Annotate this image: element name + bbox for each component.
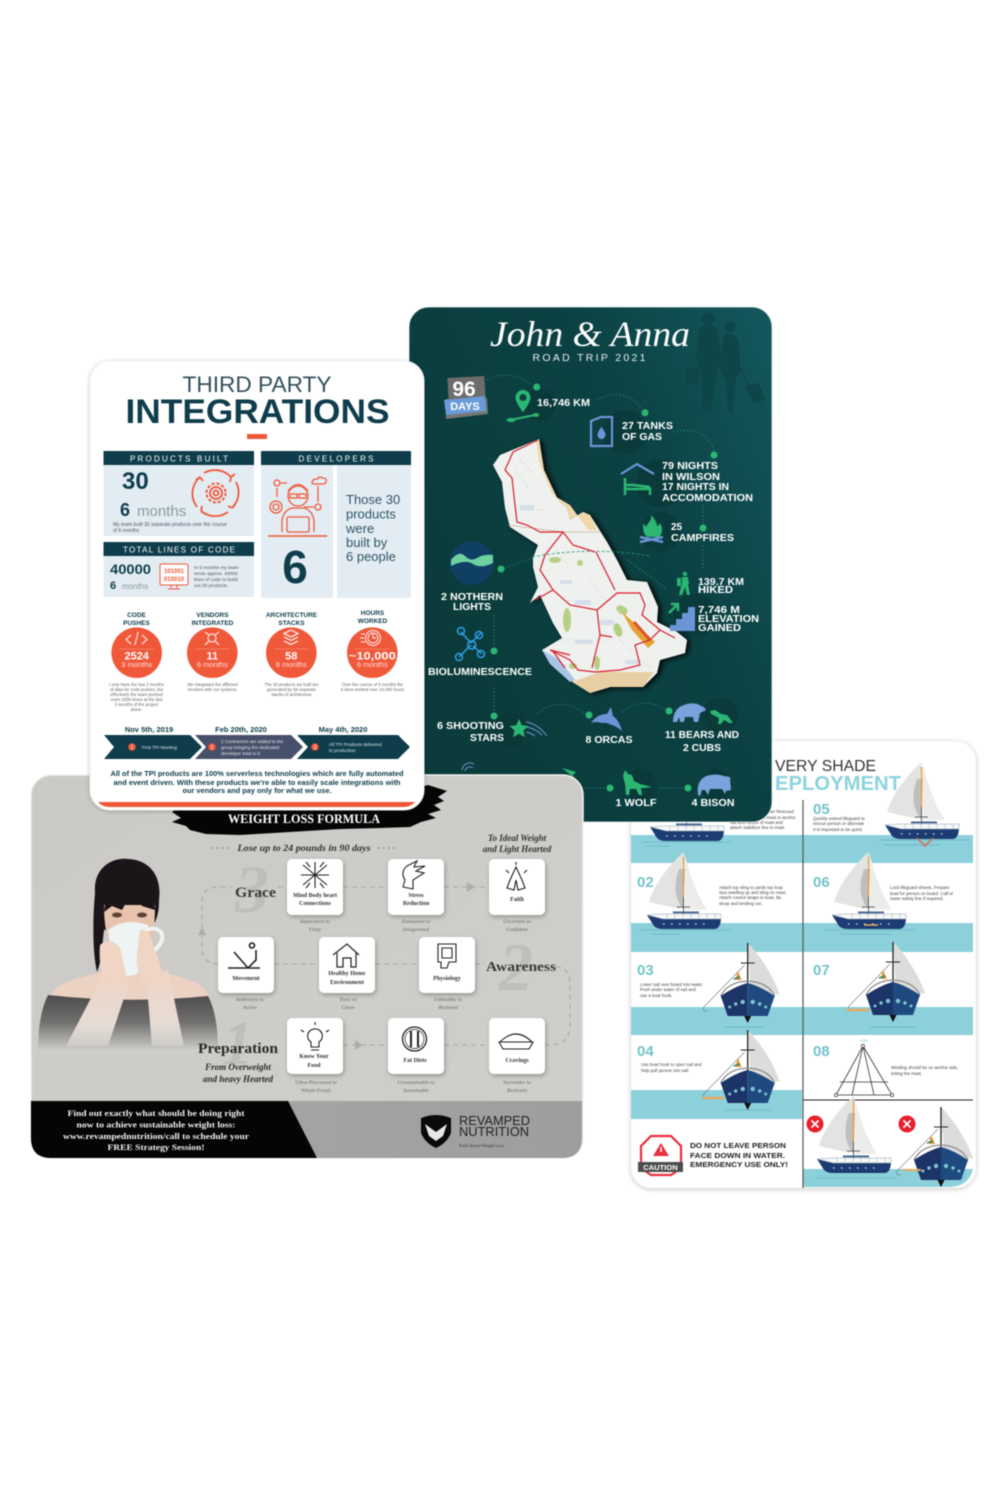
stat: tanks of gas bbox=[591, 409, 673, 446]
card: Healthy Home Environment: Toxic to bbox=[339, 997, 357, 1003]
stat circle: code pushes: I only have the last 3 months bbox=[109, 682, 164, 687]
card: Stress Reduction: Invigorated bbox=[402, 927, 429, 933]
call to action text: Find out exactly what should be doing right bbox=[68, 1108, 245, 1118]
card: Cravings bbox=[489, 1018, 545, 1094]
step 08 rigging diagram: Winding should be on anchor side, bbox=[891, 1065, 958, 1070]
step 02: 02 bbox=[637, 874, 654, 891]
stat circle: hours worked: Over the course of 6 months the bbox=[342, 682, 404, 687]
stage label: Awareness: Awareness bbox=[486, 959, 556, 974]
stat: tanks of gas: OF GAS bbox=[622, 432, 662, 443]
title: THIRD PARTY bbox=[182, 372, 332, 397]
stat: campfires bbox=[640, 515, 734, 544]
icon: binary monitor: 101001 bbox=[164, 569, 185, 575]
call to action text bbox=[63, 1108, 249, 1152]
stat: bears and cubs: 11 BEARS AND bbox=[665, 729, 739, 741]
card: Fat Diets bbox=[388, 1018, 444, 1094]
woman with mug photo bbox=[38, 859, 218, 1050]
step 05 bbox=[813, 762, 959, 846]
logo: Revamped Nutrition: REVAMPED bbox=[459, 1113, 530, 1128]
logo: Revamped Nutrition: Faith Based Weight Loss bbox=[459, 1143, 504, 1148]
goal text: To Ideal Weight bbox=[488, 833, 547, 843]
step 01 boat bbox=[650, 764, 724, 841]
heading: weight loss formula: WEIGHT LOSS FORMULA bbox=[228, 811, 381, 826]
card: Movement: Active bbox=[242, 1005, 257, 1011]
flow arrows bbox=[198, 882, 475, 1050]
goal text: and Light Hearted bbox=[483, 844, 552, 854]
panel: sailboat every shade deployment sheet bbox=[631, 741, 976, 1188]
footer band bbox=[31, 1101, 582, 1158]
timeline labels: 2 bbox=[211, 745, 214, 751]
caution text: FACE DOWN IN WATER. bbox=[690, 1151, 785, 1160]
step 05: rescue person or alternate bbox=[813, 821, 865, 826]
stat circle: vendors integrated: 11 bbox=[206, 650, 218, 662]
stat: bears and cubs: 2 CUBS bbox=[683, 742, 721, 754]
stat: 96 days badge bbox=[444, 376, 488, 419]
timeline labels: First TPI Meeting bbox=[142, 745, 177, 750]
step 03: use a boat hook. bbox=[640, 993, 672, 998]
panel: developers: built by bbox=[346, 535, 388, 550]
panel: products built: 6 bbox=[120, 500, 130, 520]
timeline dates: Feb 20th, 2020 bbox=[215, 725, 267, 734]
panel: developers: Those 30 bbox=[346, 492, 400, 507]
panel: products built: 30 bbox=[122, 468, 149, 495]
panel: developers bbox=[261, 451, 411, 598]
stat: bears and cubs bbox=[665, 703, 739, 754]
stat: bioluminescence: BIOLUMINESCENCE bbox=[428, 667, 532, 678]
card: Physiology: Physiology bbox=[433, 976, 461, 982]
step 02 bbox=[637, 852, 787, 929]
card: Stress Reduction bbox=[388, 859, 444, 933]
stat: elevation gained: GAINED bbox=[698, 623, 741, 634]
stat: tanks of gas: 27 TANKS bbox=[622, 421, 673, 432]
closing statement: All of the TPI products are 100% serverless technologies which are fully automated bbox=[110, 769, 404, 778]
call to action text: FREE Strategy Session! bbox=[108, 1142, 205, 1152]
timeline labels: 1 bbox=[131, 745, 134, 751]
stat circle: code pushes: CODE bbox=[127, 612, 147, 619]
step 07 bbox=[813, 942, 925, 1022]
step 01 text: attach stabilizer line to mast bbox=[730, 825, 785, 830]
stat: distance: 16,746 KM bbox=[537, 398, 590, 409]
stat circle: vendors integrated: INTEGRATED bbox=[192, 620, 234, 627]
card: Know Your Food: Whole-Foods bbox=[301, 1088, 331, 1094]
card: Know Your Food: Food bbox=[307, 1063, 321, 1069]
timeline labels: to production bbox=[329, 748, 356, 753]
caution text: EMERGENCY USE ONLY! bbox=[690, 1160, 788, 1169]
stat circle: architecture stacks bbox=[264, 612, 319, 697]
card: Movement bbox=[218, 937, 274, 1011]
step 03: Lower sail over board into water. bbox=[640, 982, 703, 987]
peeking graphics behind the weight loss sheet bbox=[462, 763, 576, 776]
card: Movement: Movement bbox=[232, 976, 260, 982]
step 05: It is important to be quick. bbox=[813, 827, 863, 832]
stat circle: architecture stacks: 58 bbox=[285, 650, 297, 662]
title: INTEGRATIONS bbox=[126, 393, 390, 431]
divider lines bbox=[802, 800, 804, 1188]
stat circle: architecture stacks: stacks of architecture bbox=[271, 692, 312, 697]
card: Movement: Sedentary to bbox=[236, 997, 264, 1003]
step 04 bbox=[637, 1030, 780, 1110]
card: Cravings: Cravings bbox=[505, 1058, 529, 1064]
goal text bbox=[483, 833, 552, 854]
stat circle: architecture stacks: STACKS bbox=[278, 620, 305, 627]
panel: products built bbox=[104, 451, 254, 536]
stat: shooting stars bbox=[437, 712, 547, 744]
heading brush stroke bbox=[172, 785, 447, 835]
panel: developers: 6 people bbox=[346, 549, 396, 564]
stat: distance bbox=[506, 384, 590, 422]
stat: nights: 79 NIGHTS bbox=[662, 460, 718, 472]
stat: wolf: 1 WOLF bbox=[616, 797, 657, 809]
step 04: help pull person into sail. bbox=[641, 1068, 689, 1073]
big numeral 1: 1 bbox=[222, 1010, 253, 1078]
stage label: Preparation: and heavy Hearted bbox=[203, 1074, 273, 1084]
card: Stress Reduction: Stress bbox=[408, 893, 424, 899]
heading: every shade deployment: EPLOYMENT bbox=[775, 773, 901, 795]
orange footer strip bbox=[98, 802, 415, 807]
stat circle: architecture stacks: ARCHITECTURE bbox=[266, 612, 318, 619]
stat: hiked bbox=[677, 572, 744, 596]
timeline dates: Nov 5th, 2019 bbox=[125, 725, 173, 734]
panel: developers: DEVELOPERS bbox=[298, 454, 374, 464]
stat circle: vendors integrated: 6 months bbox=[197, 660, 228, 669]
panel: total lines of code: 6 bbox=[110, 580, 116, 592]
timeline labels bbox=[128, 739, 382, 756]
stat: orcas: 8 ORCAS bbox=[586, 734, 632, 746]
step 02: Sea swelling up and sling on mast. bbox=[719, 890, 787, 895]
panel: developers: products bbox=[346, 506, 396, 522]
step 02: sloop and tending out. bbox=[719, 901, 762, 906]
step 02: Attach control straps to boat. Be bbox=[719, 895, 782, 900]
stat circle: code pushes: effectively the team pushed bbox=[110, 692, 163, 697]
decorative dark halos bbox=[492, 389, 738, 801]
panel: total lines of code: 40000 bbox=[110, 561, 151, 577]
stat circle: hours worked: WORKED bbox=[358, 618, 388, 625]
timeline dates: May 4th, 2020 bbox=[319, 725, 367, 734]
timeline labels: developer total to 6 bbox=[221, 751, 261, 756]
stat: nights: IN WILSON bbox=[662, 471, 720, 483]
stat circle: architecture stacks: The 30 products we built are bbox=[264, 682, 319, 687]
stat: bioluminescence bbox=[428, 628, 532, 678]
step 08 rigging diagram: TOP bbox=[860, 1038, 868, 1043]
stat circle: architecture stacks: generated by 58 separate bbox=[267, 687, 317, 692]
stat circle: code pushes: 3 months of the project bbox=[115, 702, 159, 707]
call to action text: now to achieve sustainable weight loss: bbox=[76, 1120, 236, 1130]
timeline dates bbox=[125, 725, 367, 734]
card: Faith: Confident bbox=[506, 926, 528, 933]
stat circle: vendors integrated: VENDORS bbox=[196, 612, 229, 619]
card: Faith: Uncertain to bbox=[503, 919, 531, 925]
step 03 bbox=[637, 943, 780, 1023]
icon: binary monitor: 010010 bbox=[164, 577, 185, 583]
timeline labels: group bringing the dedicated bbox=[221, 745, 280, 750]
call to action text: www.revampednutrition/call to schedule your bbox=[63, 1131, 249, 1141]
stage label: Preparation bbox=[198, 1041, 278, 1084]
timeline arrow 2 bbox=[195, 735, 303, 759]
panel: weight loss formula sheet bbox=[31, 775, 583, 1158]
title: John & Anna bbox=[490, 314, 690, 354]
card: Stress Reduction: Reduction bbox=[403, 901, 430, 907]
stat: bison: 4 BISON bbox=[692, 797, 734, 809]
stat: campfires: 25 bbox=[671, 522, 683, 533]
step 01 text: rope and attach to mast to anchor bbox=[730, 815, 796, 820]
big numeral 3: 3 bbox=[234, 851, 269, 927]
step 03: 03 bbox=[637, 962, 654, 979]
stat: bison bbox=[684, 774, 734, 809]
card: Know Your Food: Know Your bbox=[299, 1054, 329, 1060]
card: Mind Body heart Connections: Connections bbox=[299, 901, 331, 907]
stat circle: hours worked: HOURS bbox=[361, 610, 385, 617]
travellers silhouette bbox=[686, 312, 765, 412]
step 06: 06 bbox=[813, 874, 830, 891]
card: Cravings: Restraint bbox=[506, 1088, 528, 1094]
card: Physiology: Restored bbox=[437, 1005, 458, 1011]
heading: every shade deployment bbox=[775, 758, 901, 795]
step 05: Quickly extend lifeguard to bbox=[813, 816, 865, 821]
panel: third party integrations sheet bbox=[90, 361, 424, 810]
icon: caution sign bbox=[638, 1136, 683, 1175]
step 01 text: sail and centre of mast and bbox=[730, 820, 783, 825]
panel: John and Anna road trip map bbox=[409, 307, 772, 822]
step 08 rigging diagram bbox=[813, 1038, 958, 1097]
card: Fat Diets: Fat Diets bbox=[403, 1058, 427, 1064]
card: Mind Body heart Connections: Unity bbox=[309, 927, 322, 933]
card: Stress Reduction: Exhausted to bbox=[401, 919, 431, 925]
step 06: Lock lifeguard sheets. Prepare bbox=[890, 885, 950, 890]
step 05: 05 bbox=[813, 801, 830, 818]
card: Physiology bbox=[419, 937, 475, 1011]
stat: shooting stars: STARS bbox=[470, 732, 504, 744]
stat circle: hours worked bbox=[341, 610, 404, 692]
card: Mind Body heart Connections bbox=[287, 859, 343, 933]
stat circle: vendors integrated: We integrated the different bbox=[187, 682, 239, 687]
step 06 bbox=[813, 852, 954, 929]
caution text bbox=[690, 1141, 788, 1169]
icon: caution sign: CAUTION bbox=[643, 1163, 678, 1172]
icon: gears with cycle arrows bbox=[192, 470, 239, 516]
panel: total lines of code: TOTAL LINES OF CODE bbox=[123, 546, 235, 554]
card: Mind Body heart Connections: Separation to bbox=[300, 919, 330, 925]
stat: elevation gained: ELEVATION bbox=[698, 614, 759, 625]
step 04: Use boat hook to open sail and bbox=[641, 1062, 702, 1067]
title accent bbox=[247, 434, 267, 439]
card: Healthy Home Environment: Healthy Home bbox=[328, 971, 366, 977]
stat: northern lights bbox=[441, 541, 504, 613]
stat: elevation gained: 7,746 M bbox=[698, 605, 740, 616]
step 01 text bbox=[730, 809, 796, 830]
card: Faith: Faith bbox=[510, 897, 524, 903]
timeline arrow 1 bbox=[104, 735, 202, 759]
panel: total lines of code: lines of code to build bbox=[194, 577, 238, 583]
icon: developer at laptop bbox=[268, 477, 327, 536]
teal water bands bbox=[631, 835, 973, 1187]
timeline arrow 3 bbox=[297, 735, 410, 759]
timeline bbox=[104, 725, 410, 759]
card: Know Your Food bbox=[287, 1018, 343, 1094]
panel: products built: PRODUCTS BUILT bbox=[130, 454, 228, 464]
timeline labels: All TPI Products delivered bbox=[329, 742, 382, 747]
stat: northern lights: LIGHTS bbox=[453, 601, 491, 613]
step 04: 04 bbox=[637, 1043, 654, 1060]
stat circle: code pushes: 3 months bbox=[121, 660, 152, 669]
closing statement: and event driven. With these products we're able to easily scale integrations with bbox=[114, 778, 400, 787]
stat: 96 days badge: 96 bbox=[452, 378, 476, 401]
stat: nights: ACCOMODATION bbox=[662, 492, 753, 504]
stat circle: hours worked: 6 devs worked over 10,000 hours bbox=[341, 687, 404, 692]
stat: campfires: CAMPFIRES bbox=[671, 533, 734, 544]
panel: total lines of code: wrote approx. 40000 bbox=[194, 571, 238, 577]
stat: nights: 17 NIGHTS IN bbox=[662, 481, 729, 493]
stat: wolf bbox=[606, 770, 657, 809]
dashed flow path bbox=[202, 887, 570, 1045]
stat circle: code pushes: more 2500 times at the last bbox=[111, 697, 163, 702]
big numeral 2: 2 bbox=[498, 929, 533, 1005]
stat: orcas bbox=[586, 707, 632, 746]
panel: total lines of code: out 30 products. bbox=[194, 583, 228, 589]
water ripples bbox=[640, 840, 970, 1178]
panel: total lines of code: months bbox=[122, 582, 148, 591]
icon: binary monitor bbox=[160, 564, 188, 589]
stat: elevation gained bbox=[669, 604, 759, 634]
stat: northern lights: 2 NOTHERN bbox=[441, 591, 503, 603]
closing statement: our vendors and pay only for what we use. bbox=[182, 786, 332, 795]
panel: total lines of code: In 6 months my team bbox=[194, 565, 239, 571]
card: Fat Diets: Sustainable bbox=[403, 1088, 429, 1094]
stat: 96 days badge: DAYS bbox=[450, 401, 480, 413]
panel: total lines of code bbox=[104, 542, 254, 597]
map of British Columbia with route bbox=[493, 439, 687, 693]
caution text: DO NOT LEAVE PERSON bbox=[690, 1141, 786, 1150]
panel: products built: My team built 30 separate products over the course bbox=[113, 522, 227, 528]
stage label: Preparation: Preparation bbox=[198, 1041, 278, 1057]
stage label: Preparation: From Overweight bbox=[204, 1062, 271, 1072]
stat circle: code pushes: 2524 bbox=[124, 650, 150, 662]
card: Healthy Home Environment bbox=[319, 937, 375, 1011]
logo: Revamped Nutrition: NUTRITION bbox=[459, 1124, 529, 1139]
subtitle: ROAD TRIP 2021 bbox=[532, 352, 646, 364]
card: Faith bbox=[489, 859, 545, 933]
logo: Revamped Nutrition bbox=[421, 1113, 530, 1148]
stat: nights bbox=[621, 452, 753, 504]
step 08 rigging diagram: letting the mast. bbox=[891, 1071, 922, 1076]
stat circle: hours worked: 6 months bbox=[357, 660, 388, 669]
step 01 text: person overboard, lifter Rescued bbox=[730, 809, 794, 814]
card: Know Your Food: Ultra-Processed to bbox=[295, 1080, 337, 1086]
card: Healthy Home Environment: Environment bbox=[330, 980, 364, 986]
stat circle: code pushes: PUSHES bbox=[123, 620, 151, 627]
step 07: 07 bbox=[813, 962, 830, 979]
card: Mind Body heart Connections: Mind Body heart bbox=[293, 893, 337, 899]
stat circle: hours worked: ~10,000 bbox=[349, 650, 396, 662]
closing statement bbox=[110, 769, 404, 795]
subtitle: Lose up to 24 pounds in 90 days bbox=[236, 843, 371, 854]
step 06: boat for person on board. Call or bbox=[890, 891, 954, 896]
stat: shooting stars: 6 SHOOTING bbox=[437, 720, 504, 732]
card: Physiology: Unhealthy to bbox=[434, 997, 463, 1003]
step 06: tower safety line if required. bbox=[890, 896, 944, 901]
panel: developers: 6 bbox=[282, 541, 308, 593]
panel: products built: of 6 months bbox=[113, 528, 140, 534]
card: Healthy Home Environment: Clean bbox=[341, 1005, 355, 1011]
stat circle: vendors integrated: Vendors with our systems. bbox=[187, 687, 238, 692]
timeline labels: 3 bbox=[314, 745, 317, 751]
heading: every shade deployment: VERY SHADE bbox=[775, 758, 876, 775]
incorrect examples bbox=[806, 1096, 973, 1187]
stat circle: architecture stacks: 6 months bbox=[276, 660, 307, 669]
timeline labels: 2 Contractors are added to the bbox=[221, 739, 284, 744]
stat: hiked: HIKED bbox=[698, 585, 733, 596]
stage label: Grace: Grace bbox=[235, 885, 277, 901]
stat circle: code pushes: alone. bbox=[131, 707, 142, 712]
step 08 rigging diagram: 08 bbox=[813, 1043, 830, 1060]
title bbox=[126, 372, 390, 431]
stat circle: code pushes bbox=[109, 612, 164, 712]
dotted route connectors bbox=[487, 375, 714, 788]
card: Fat Diets: Unsustainable to bbox=[397, 1080, 435, 1086]
step 02: Attach top sling to yards top loop bbox=[719, 885, 783, 890]
step 03: Push under water of sail and bbox=[640, 987, 696, 992]
stat circle: code pushes: of data for code pushes, but bbox=[110, 687, 164, 692]
panel: developers: were bbox=[345, 521, 374, 536]
stat: hiked: 139.7 KM bbox=[698, 577, 744, 588]
card: Cravings: Surrender to bbox=[503, 1080, 531, 1086]
stat circle: vendors integrated bbox=[187, 612, 239, 692]
panel: products built: months bbox=[137, 503, 186, 520]
